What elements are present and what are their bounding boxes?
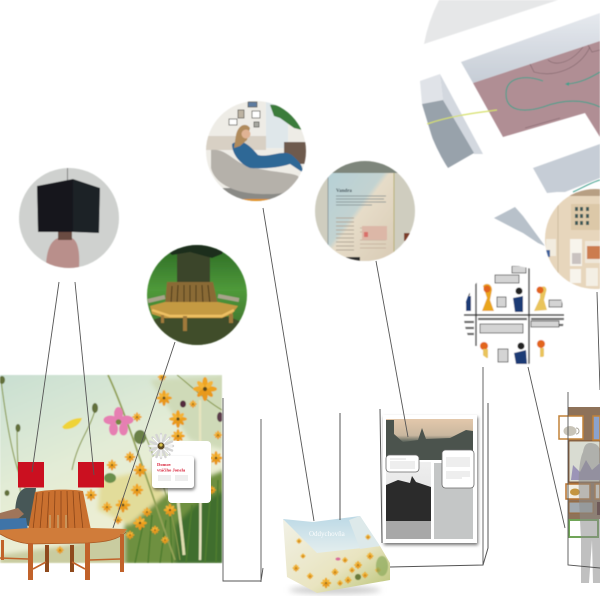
grey panel: [434, 463, 473, 539]
sofa title: Oddychovňa: [309, 530, 346, 538]
panel frame: [328, 173, 394, 258]
line: tree bench: [113, 342, 175, 528]
bench seat: [0, 528, 127, 544]
person shirt: [46, 238, 79, 268]
blue pattern frame: [593, 416, 600, 440]
panel frames: [464, 266, 564, 364]
callout left: [386, 455, 419, 472]
sofa body: [283, 519, 390, 593]
line: cube to right square: [75, 282, 94, 475]
plan: main wall: [461, 13, 600, 83]
yellow petal: [62, 418, 82, 429]
wall background: [315, 161, 415, 261]
person neck: [58, 232, 72, 240]
speech bubbles: [480, 266, 562, 362]
large photo: [569, 441, 600, 482]
shirt: [15, 488, 36, 527]
beanbag: [211, 150, 299, 194]
woman's hair: [234, 125, 250, 148]
wireframe: shelf box: [568, 392, 600, 568]
green meadow: [0, 375, 225, 565]
sofa in background: [206, 136, 266, 150]
plant: [270, 105, 302, 130]
plan: left room side wall: [440, 74, 483, 154]
bench armrests: [148, 296, 239, 301]
beanbag sofa: [283, 516, 390, 594]
line: cube to left square: [32, 282, 59, 472]
sky: [0, 375, 222, 563]
comic background: [464, 266, 564, 366]
photo circle: tree bench: [143, 245, 247, 347]
lower frames: [570, 239, 582, 266]
cube: [37, 179, 100, 233]
grass blades: [135, 480, 218, 563]
red square left: [18, 462, 44, 488]
sofa flowers: [292, 534, 388, 588]
plan: left room floor: [422, 100, 474, 168]
visitor silhouette: [579, 443, 600, 583]
photo circle: person with cube: [19, 168, 119, 268]
slats: [33, 491, 83, 530]
panel: [328, 173, 394, 261]
cup frame: [559, 416, 583, 439]
shadow on ground: [154, 316, 240, 346]
old photo: [386, 462, 431, 539]
white card on mural: [168, 441, 211, 503]
plan: visitor route: [506, 72, 600, 192]
line: beanbag: [263, 208, 314, 521]
dark base: [346, 257, 360, 261]
tree silhouette: [386, 476, 431, 521]
castle silhouette: [386, 420, 473, 460]
poster: [383, 415, 477, 543]
line: exhibition panel: [376, 261, 408, 437]
bench back: [165, 282, 218, 305]
brown backing: [568, 407, 600, 519]
orange flowers: [56, 373, 223, 554]
tree trunk: [176, 252, 210, 282]
card title: Domov: [157, 462, 172, 467]
line: comic right: [528, 367, 565, 528]
plan: small wall fragment: [494, 207, 545, 246]
left panel: [546, 239, 556, 256]
jeans: [0, 518, 28, 530]
floral frame: [566, 484, 590, 499]
shelf display: [559, 407, 600, 583]
sofa right wing: [349, 516, 380, 549]
photo circle: exhibition panel: [315, 161, 415, 261]
title card: [152, 456, 194, 488]
blue-suited figures: [466, 288, 527, 364]
hanging wire: [66, 168, 68, 180]
line: gallery: [597, 292, 600, 390]
pink cosmos: [104, 407, 134, 436]
plan: left room back wall: [420, 74, 443, 104]
dark picture: [404, 233, 412, 241]
seated person: [0, 488, 36, 530]
panel lower columns: [336, 218, 354, 250]
text strips: [464, 319, 564, 334]
floor rug: [222, 188, 284, 202]
bench back: [28, 490, 91, 530]
plan: route arrow: [565, 82, 569, 86]
woman's face: [242, 130, 250, 138]
wall frames: [229, 102, 260, 127]
bench rails: [0, 558, 120, 569]
orange-haired figures: [480, 284, 547, 358]
bench legs: [1, 534, 124, 580]
side table: [284, 142, 306, 164]
woman's outfit: [232, 141, 303, 172]
card title: vtáčiho Jonela: [157, 468, 186, 472]
gaps behind slats: [50, 515, 66, 530]
blue-grey frame: [569, 502, 593, 513]
lawn: [147, 245, 247, 345]
small frame: [595, 484, 600, 499]
wireframe: beanbag post: [339, 413, 341, 520]
bench legs: [161, 314, 233, 331]
red highlight box: [362, 226, 387, 240]
buds: [0, 376, 223, 496]
wood wall: [545, 189, 600, 290]
panel text lines: [336, 196, 386, 205]
floor plan circle: [420, 0, 600, 246]
foliage: [170, 244, 224, 258]
plan: yellow line: [427, 110, 497, 124]
card text lines: [158, 476, 188, 480]
ceiling: [315, 161, 415, 173]
callout right: [442, 450, 474, 488]
top photo: [386, 419, 473, 460]
room background: [206, 101, 306, 201]
bench seat: [150, 302, 238, 318]
background: [19, 168, 119, 268]
photo circle: gallery wall: [545, 189, 600, 290]
window: [266, 101, 288, 148]
wireframe: mural box: [223, 398, 263, 582]
panel heading: Vandra: [336, 189, 352, 194]
forearm: [0, 508, 24, 522]
red square right: [78, 462, 104, 488]
plan: lower room wall: [533, 144, 600, 193]
stems: [1, 375, 222, 560]
green frame: [569, 520, 598, 537]
plan: grey outer area: [424, 0, 558, 44]
sofa shadow: [289, 586, 381, 594]
wireframe: poster box: [380, 403, 488, 567]
daisy icon: [149, 434, 173, 458]
line: comic left: [482, 367, 484, 565]
poster sheet: [383, 415, 477, 543]
dark frame: [597, 502, 600, 515]
photo circle: woman on beanbag: [206, 101, 306, 201]
plan: floor outlines: [525, 45, 600, 128]
connector lines: [32, 208, 600, 565]
panel: flower mural wall: [0, 373, 225, 565]
river: [386, 521, 431, 539]
photo circle: comic strip: [464, 266, 564, 366]
sofa back: [283, 516, 380, 553]
plan: rose floor: [473, 41, 600, 137]
dark frame: [571, 204, 600, 230]
wooden tree bench: [0, 490, 127, 580]
